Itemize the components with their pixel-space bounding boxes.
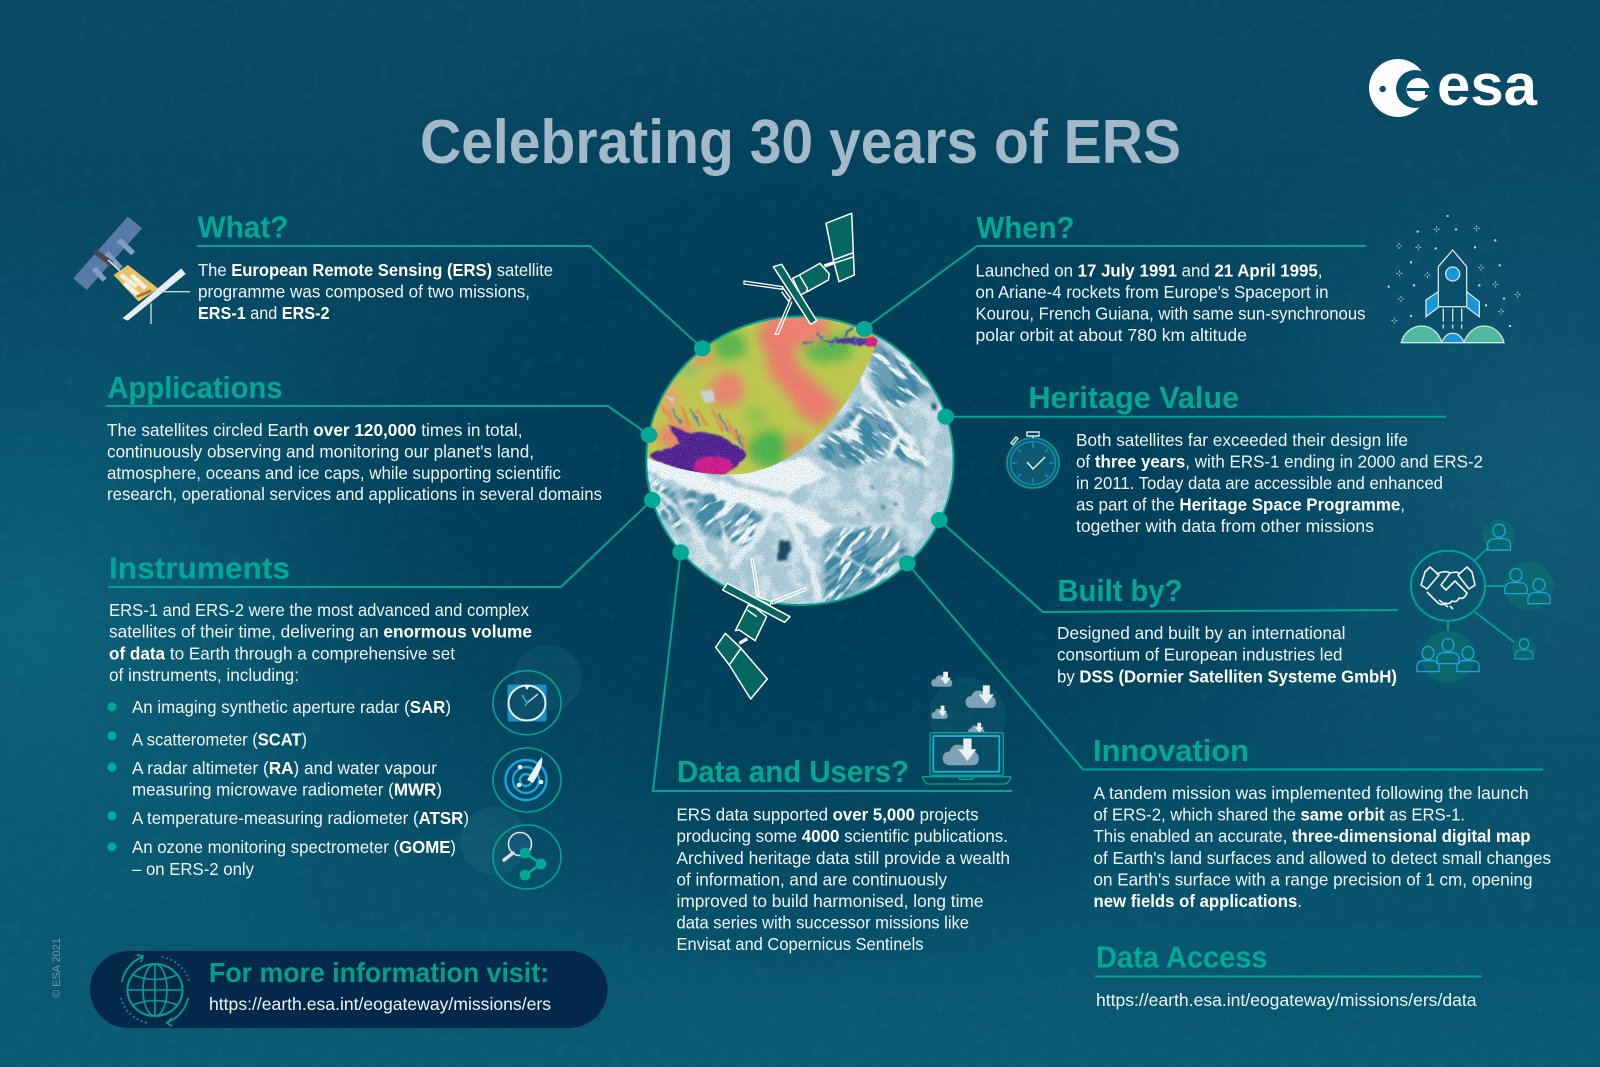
text: Data Access URL: https://earth.esa.int/eogateway/missions/ers/data <box>1096 990 1477 1010</box>
copyright note: © ESA 2021 <box>51 938 63 998</box>
logo: esa <box>1369 53 1538 118</box>
text: Innovation body: of Earth's land surfaces and allowed to detect small changes <box>1094 848 1551 868</box>
icon: globe <box>121 955 189 1026</box>
list: instruments: A temperature-measuring radiometer (ATSR) <box>132 808 469 828</box>
panel: What? <box>73 210 553 324</box>
logo: esa: esa <box>1437 53 1538 118</box>
text: What? body: The European Remote Sensing (ERS) satellite <box>198 260 553 280</box>
list: instruments: measuring microwave radiometer (MWR) <box>132 780 442 800</box>
text: more information URL: https://earth.esa.int/eogateway/missions/ers <box>209 994 551 1014</box>
text: When? body: polar orbit at about 780 km altitude <box>976 325 1247 345</box>
text: What? body: ERS-1 and ERS-2 <box>198 303 330 323</box>
icon: SAR clock <box>493 645 582 735</box>
icon: radar altimeter <box>493 748 561 812</box>
icon: consortium handshake network <box>1411 520 1554 683</box>
text: Heritage body: Both satellites far exceeded their design life <box>1076 430 1408 450</box>
heading: What?: What? <box>198 210 288 244</box>
text: Instruments intro: ERS-1 and ERS-2 were the most advanced and complex <box>109 600 529 620</box>
text: Applications body: The satellites circled Earth over 120,000 times in total, <box>107 420 522 440</box>
text: Heritage body <box>1076 430 1483 536</box>
connector dots <box>641 321 954 571</box>
icon: spectrometer network <box>460 807 561 889</box>
text: Innovation body: This enabled an accurate, three-dimensional digital map <box>1094 826 1530 846</box>
list: instruments: – on ERS-2 only <box>132 859 254 879</box>
text: Applications body: research, operational services and applications in several domains <box>107 484 602 504</box>
heading: Data Access: Data Access <box>1096 940 1268 974</box>
text: Innovation body: of ERS-2, which shared the same orbit as ERS-1. <box>1094 805 1465 825</box>
text: What? body <box>198 260 553 323</box>
list: instruments: An ozone monitoring spectrometer (GOME) <box>132 837 456 857</box>
text: Data and Users body: Envisat and Copernicus Sentinels <box>676 934 924 954</box>
title: Celebrating 30 years of ERS <box>420 108 1181 177</box>
text: Applications body <box>107 420 602 504</box>
panel: Data Access <box>1096 940 1477 1010</box>
panel: Instruments <box>107 550 582 889</box>
heading: Built by?: Built by? <box>1058 573 1182 608</box>
text: Instruments intro: of instruments, including: <box>109 665 299 685</box>
text: Innovation body <box>1094 783 1551 911</box>
panel: Data and Users? <box>676 672 1011 954</box>
text: When? body: on Ariane-4 rockets from Europe's Spaceport in <box>976 282 1328 302</box>
text: Applications body: continuously observing and monitoring our planet's land, <box>107 442 534 462</box>
text: Heritage body: of three years, with ERS-1 ending in 2000 and ERS-2 <box>1076 452 1483 472</box>
text: Built by body <box>1057 623 1397 686</box>
connector lines to the central image <box>106 246 1543 976</box>
heading: Data and Users?: Data and Users? <box>677 754 909 789</box>
list: instruments: An imaging synthetic aperture radar (SAR) <box>132 697 451 717</box>
panel: When? <box>976 210 1521 345</box>
text: Built by body: consortium of European industries led <box>1057 645 1342 665</box>
panel: Heritage Value <box>1007 380 1483 536</box>
text: Innovation body: new fields of applications. <box>1094 891 1302 911</box>
icon: bottom satellite outline <box>716 559 807 699</box>
text: Instruments intro: satellites of their time, delivering an enormous volume <box>109 622 532 642</box>
icon: rocket launch <box>1387 215 1521 343</box>
icon: top satellite outline <box>744 213 854 334</box>
text: Data and Users body: data series with successor missions like <box>676 913 969 933</box>
heading: Instruments: Instruments <box>109 550 290 586</box>
text: Built by body: by DSS (Dornier Satelliten Systeme GmbH) <box>1057 666 1397 686</box>
text: When? body: Kourou, French Guiana, with same sun-synchronous <box>976 304 1366 324</box>
text: When? body: Launched on 17 July 1991 and 21 April 1995, <box>976 260 1322 280</box>
list: instruments: A scatterometer (SCAT) <box>132 730 307 750</box>
heading: Applications: Applications <box>108 370 282 405</box>
text: Applications body: atmosphere, oceans and ice caps, while supporting scientific <box>107 463 561 483</box>
icon: ERS satellite <box>73 217 190 324</box>
text: What? body: programme was composed of two missions, <box>198 282 530 302</box>
text: Innovation body: A tandem mission was implemented following the launch <box>1094 783 1528 803</box>
text: Data and Users body: ERS data supported over 5,000 projects <box>676 805 979 825</box>
interferogram overlay <box>647 317 878 475</box>
heading: Heritage Value: Heritage Value <box>1028 380 1239 415</box>
text: Data and Users body: improved to build harmonised, long time <box>676 891 984 911</box>
central satellite image with coloured interferogram <box>640 212 955 700</box>
text: Data and Users body: producing some 4000 scientific publications. <box>676 826 1008 846</box>
text: Innovation body: on Earth's surface with a range precision of 1 cm, opening <box>1094 870 1532 890</box>
text: more information heading: For more information visit: <box>209 957 549 988</box>
panel: Built by? <box>1057 520 1554 686</box>
Earth outline <box>646 316 954 605</box>
text: Instruments intro: of data to Earth through a comprehensive set <box>109 644 455 664</box>
icon: laptop downloading from clouds <box>923 672 1011 784</box>
text: Data and Users body: Archived heritage data still provide a wealth <box>676 848 1010 868</box>
text: Instruments intro <box>109 600 532 685</box>
panel: Applications <box>107 370 602 504</box>
text: Data and Users body: of information, and are continuously <box>676 870 947 890</box>
heading: Innovation: Innovation <box>1093 733 1249 768</box>
icon: stopwatch <box>1007 432 1059 488</box>
text: Heritage body: in 2011. Today data are accessible and enhanced <box>1076 473 1443 493</box>
text: Data and Users body <box>676 805 1010 954</box>
text: Heritage body: together with data from other missions <box>1076 516 1374 536</box>
heading: When?: When? <box>976 210 1074 245</box>
text: Heritage body: as part of the Heritage Space Programme, <box>1076 495 1405 515</box>
text: When? body <box>976 260 1366 345</box>
panel: more information pill <box>90 951 608 1028</box>
text: Built by body: Designed and built by an international <box>1057 623 1346 643</box>
list: instruments <box>107 697 469 879</box>
list: instruments: A radar altimeter (RA) and water vapour <box>132 758 437 778</box>
panel: Innovation <box>1093 733 1551 911</box>
